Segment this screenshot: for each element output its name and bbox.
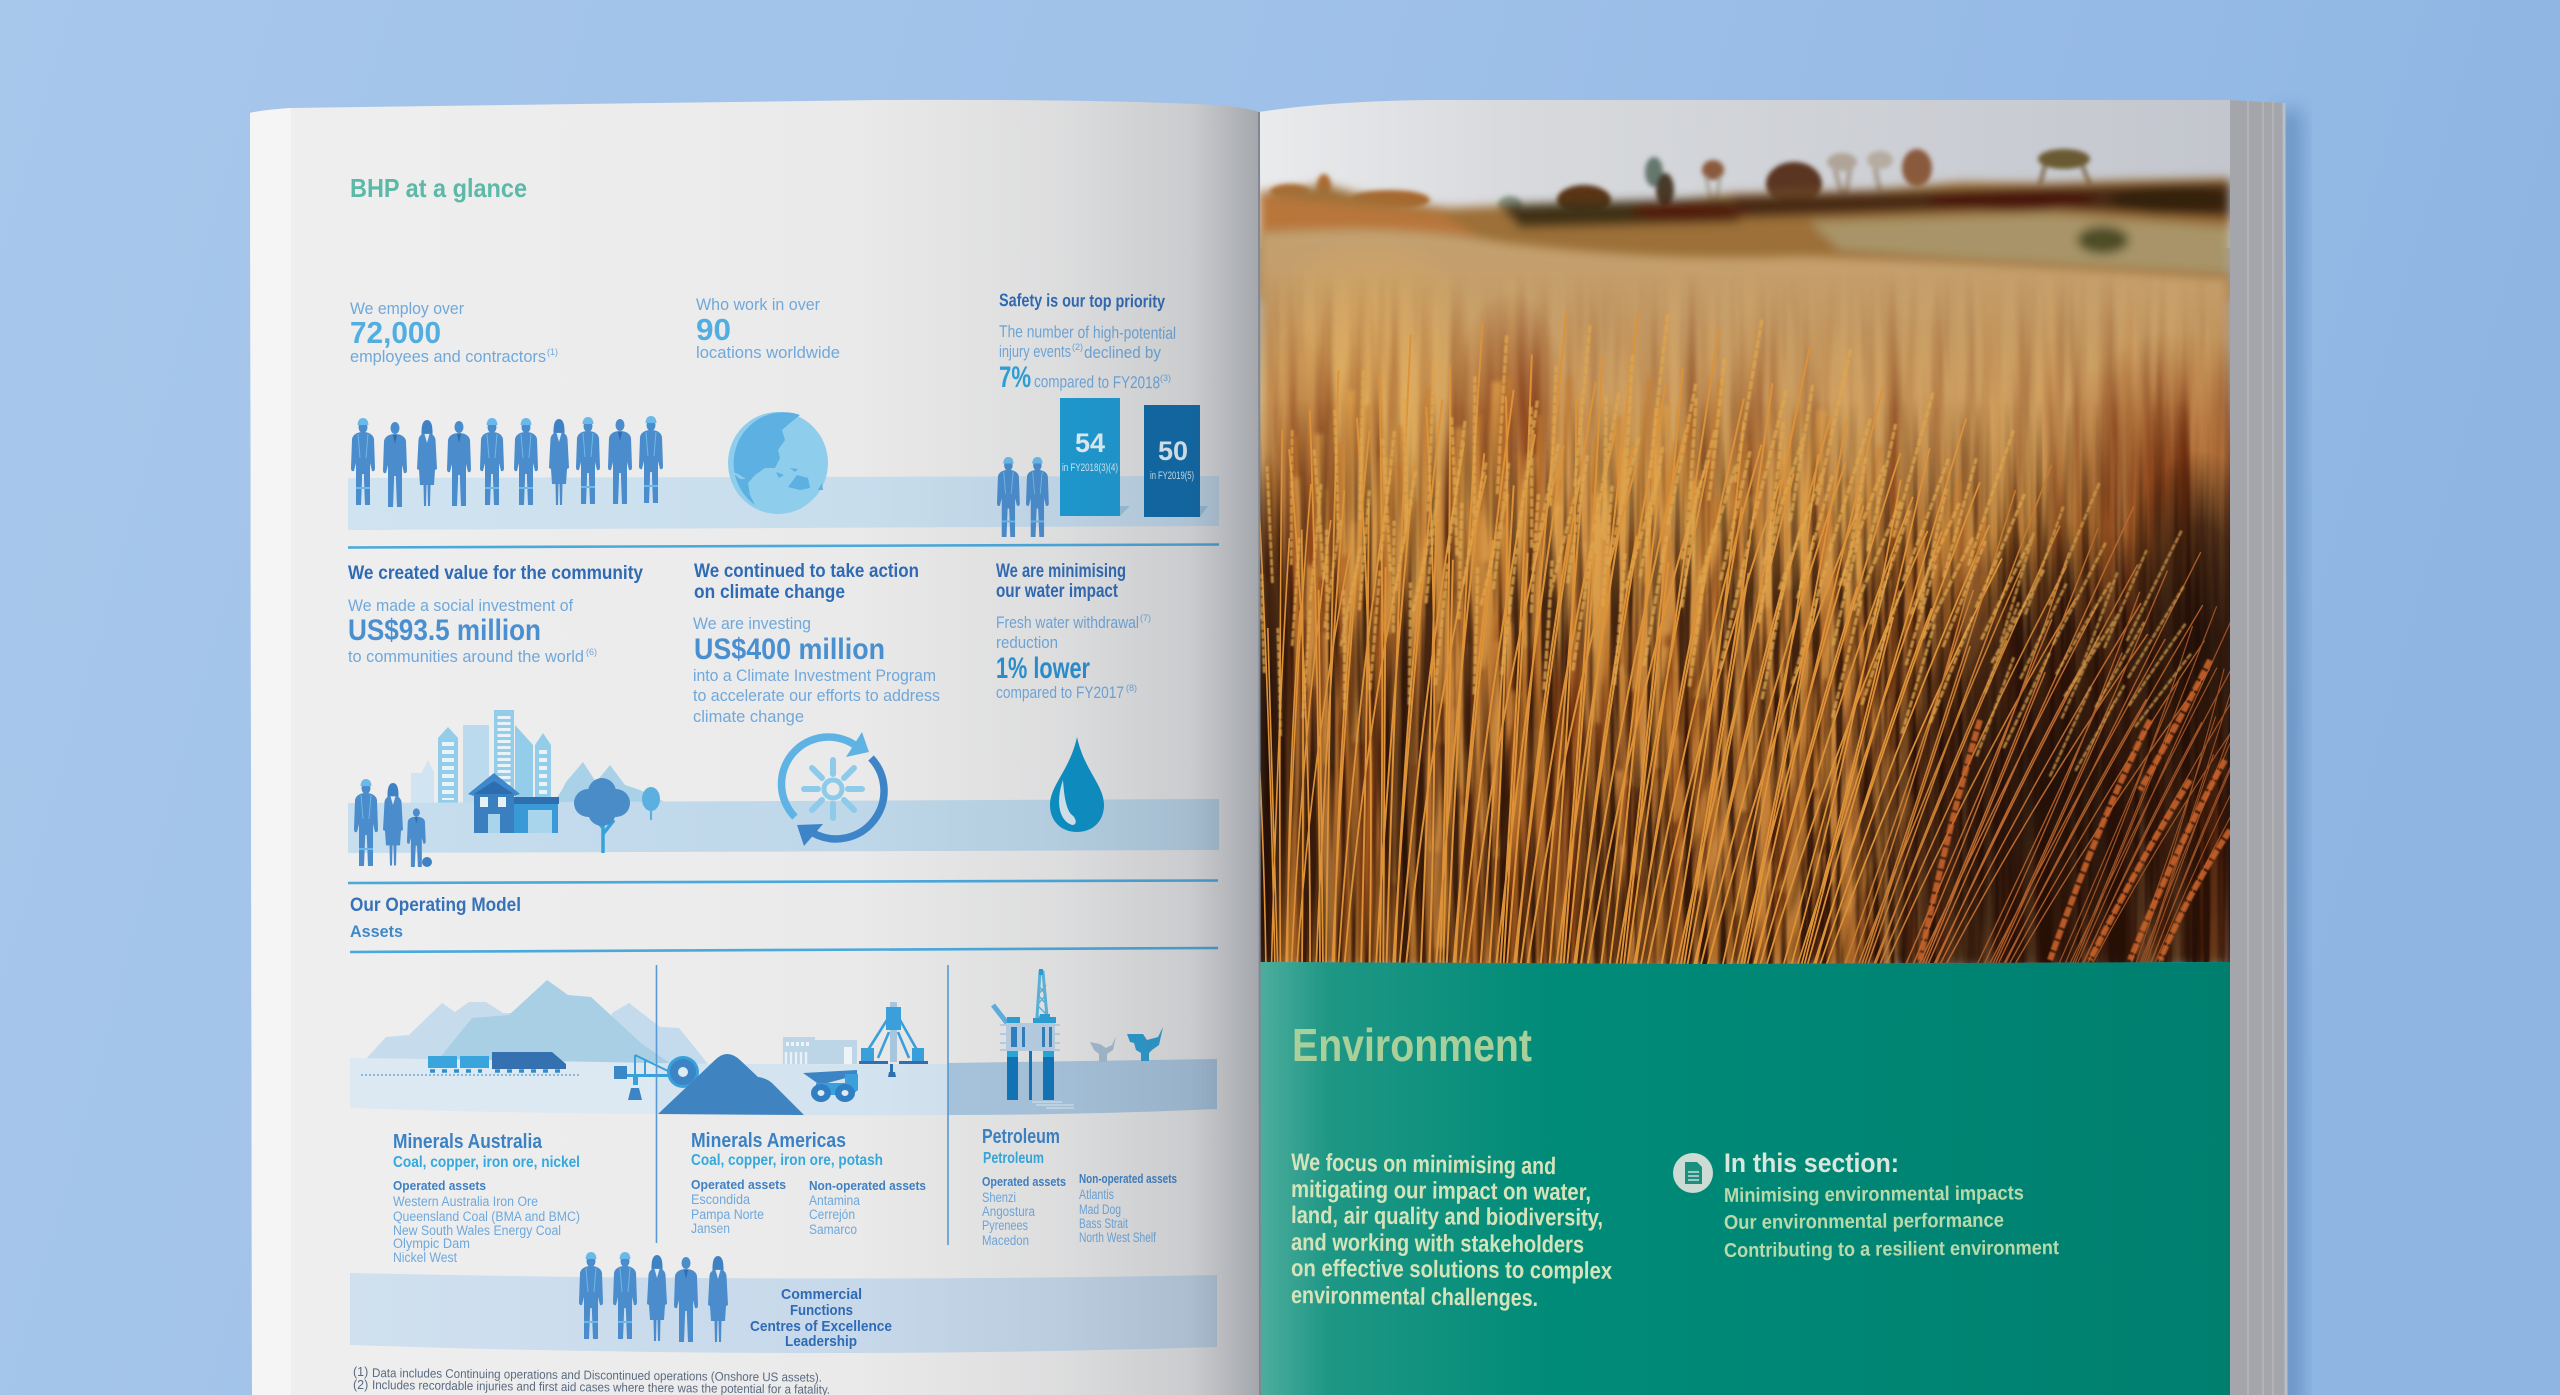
section list: In this section:: [1724, 1148, 1899, 1178]
block: community: to communities around the world: [348, 647, 584, 666]
title: BHP at a glance: [350, 173, 527, 203]
functions label: Functions: [790, 1302, 853, 1319]
intro paragraph: land, air quality and biodiversity,: [1291, 1202, 1603, 1232]
ground band 1: [348, 476, 1219, 530]
golden seed heads: [1260, 314, 2192, 778]
section list: Our environmental performance: [1724, 1210, 2004, 1234]
block: Minerals Australia: Queensland Coal (BMA and BMC): [393, 1209, 580, 1224]
page edge strip: [250, 108, 291, 1395]
stat: safety: injury events: [999, 342, 1071, 361]
functions label: Commercial: [781, 1286, 862, 1303]
block: water: compared to FY2017: [996, 683, 1124, 702]
block: Petroleum: Shenzi: [982, 1190, 1016, 1205]
block: water: We are minimising: [996, 561, 1126, 582]
block: Petroleum: Macedon: [982, 1233, 1029, 1248]
heading: operating model: Our Operating Model: [350, 895, 521, 916]
book shadow: [2278, 110, 2302, 1395]
stat: locations: [696, 295, 840, 362]
icon: train: [361, 1052, 581, 1075]
page edge stack: [2226, 100, 2287, 1395]
grass base: [1259, 229, 2230, 965]
block: climate: US$400 million: [694, 633, 885, 666]
block: Minerals Americas: Cerrejón: [809, 1207, 855, 1222]
distant trees: [1270, 149, 2090, 215]
stat: safety: 7%: [999, 361, 1031, 394]
page sheet: [250, 100, 1259, 1395]
footnotes: (1): [353, 1365, 368, 1379]
icon: small tree: [642, 787, 660, 820]
ground bands: [350, 1058, 1217, 1115]
photo: dry grass landscape: [1260, 100, 2230, 964]
stat: safety: declined by: [1084, 343, 1161, 362]
section list: [1724, 1148, 2059, 1262]
block: Petroleum: Mad Dog: [1079, 1202, 1121, 1217]
block: Minerals Australia: [393, 1131, 580, 1265]
stat: safety: [999, 290, 1176, 394]
stat: safety: compared to FY2018: [1034, 372, 1160, 392]
block: water: [996, 561, 1151, 702]
block: Minerals Americas: Escondida: [691, 1192, 750, 1207]
teal panel: [1259, 962, 2230, 1395]
grass tone patches: [1260, 280, 2230, 674]
heading: operating model: Assets: [350, 922, 403, 941]
icon: tree: [574, 778, 630, 853]
icon: climate cycle: [781, 732, 884, 846]
panel: right page: [1258, 100, 2230, 1395]
block: Petroleum: Angostura: [982, 1204, 1035, 1219]
section list: Contributing to a resilient environment: [1724, 1237, 2059, 1262]
block: climate: into a Climate Investment Program: [693, 666, 936, 685]
block: Minerals Americas: Antamina: [809, 1193, 860, 1208]
intro paragraph: mitigating our impact on water,: [1291, 1176, 1591, 1206]
icon: globe: [728, 412, 828, 514]
block: Petroleum: Non-operated assets: [1079, 1171, 1177, 1186]
bar FY2018: [1060, 398, 1130, 516]
block: climate: We are investing: [693, 614, 811, 633]
intro paragraph: We focus on minimising and: [1291, 1149, 1556, 1180]
block: Minerals Americas: Pampa Norte: [691, 1207, 764, 1222]
block: water: our water impact: [996, 581, 1119, 602]
block: Petroleum: Operated assets: [982, 1174, 1066, 1189]
ground band 4: [350, 1273, 1217, 1353]
block: Petroleum: Atlantis: [1079, 1187, 1114, 1202]
heading: operating model: [350, 895, 521, 941]
block: community: US$93.5 million: [348, 614, 541, 647]
block: water: (7): [1140, 613, 1151, 623]
stat: locations: locations worldwide: [696, 343, 840, 362]
block: Minerals Australia: Western Australia Iron Ore: [393, 1194, 538, 1209]
block: Minerals Americas: Jansen: [691, 1221, 730, 1236]
stat: employees: 72,000: [350, 315, 441, 350]
block: Petroleum: Pyrenees: [982, 1218, 1028, 1233]
intro paragraph: and working with stakeholders: [1291, 1229, 1584, 1259]
lower-right red heads: [1920, 660, 2230, 960]
block: Minerals Americas: [691, 1130, 926, 1237]
block: Minerals Australia: Minerals Australia: [393, 1131, 543, 1153]
stat: locations: Who work in over: [696, 295, 820, 314]
block: Minerals Australia: New South Wales Energy Coal: [393, 1223, 561, 1238]
stat: locations: 90: [696, 312, 731, 347]
ground band 2: [348, 799, 1219, 853]
panel: left page: [250, 95, 1260, 1395]
block: Petroleum: [982, 1126, 1177, 1248]
functions label: Centres of Excellence: [750, 1318, 892, 1335]
icon: reclaimer: [614, 1055, 699, 1100]
block: community: [348, 563, 643, 666]
section list: Minimising environmental impacts: [1724, 1182, 2024, 1207]
functions label: Leadership: [785, 1333, 857, 1350]
fine dark streaks: [1259, 400, 2230, 965]
dark shadow patches: [1260, 456, 2230, 963]
block: Minerals Australia: Nickel West: [393, 1250, 457, 1265]
block: Petroleum: Bass Strait: [1079, 1216, 1128, 1231]
grass streak texture: [1259, 260, 2230, 965]
icon: oil rig: [993, 969, 1074, 1108]
footnotes: Data includes Continuing operations and Discontinued operations (Onshore US assets).: [372, 1366, 822, 1385]
block: Minerals Americas: Minerals Americas: [691, 1130, 846, 1152]
bar FY2018: in FY2018(3)(4): [1062, 462, 1118, 474]
icon: two workers: [997, 457, 1049, 537]
icon: city skyline: [411, 710, 667, 803]
intro paragraph: [1291, 1149, 1613, 1312]
icon: ore pile: [658, 1054, 804, 1115]
intro paragraph: environmental challenges.: [1291, 1282, 1538, 1312]
stat: safety: Safety is our top priority: [999, 290, 1165, 311]
block: community: We made a social investment of: [348, 596, 573, 615]
block: Petroleum: Petroleum: [982, 1126, 1060, 1148]
icon: processing building: [783, 1037, 857, 1064]
block: Petroleum: Petroleum: [983, 1150, 1044, 1167]
block: Minerals Australia: Olympic Dam: [393, 1236, 470, 1251]
icon: water drop: [1050, 737, 1104, 832]
block: water: (8): [1126, 683, 1137, 693]
soft out-of-focus grass tufts: [1264, 376, 1994, 964]
intro paragraph: on effective solutions to complex: [1291, 1255, 1613, 1285]
block: climate: [693, 561, 940, 726]
block: water: 1% lower: [996, 652, 1090, 685]
block: climate: to accelerate our efforts to address: [693, 686, 940, 705]
block: Minerals Americas: Operated assets: [691, 1177, 786, 1192]
stat: safety: The number of high-potential: [999, 322, 1176, 343]
block: water: reduction: [996, 633, 1058, 652]
icon: family: [354, 779, 432, 867]
illustration: operating assets: [350, 969, 1217, 1115]
stat: safety: (3): [1160, 373, 1171, 383]
stat: employees: (1): [547, 347, 558, 357]
block: Minerals Australia: Coal, copper, iron ore, nickel: [393, 1154, 580, 1171]
mountains: [365, 980, 708, 1064]
sky: [1259, 98, 2230, 248]
bar FY2019: in FY2019(5): [1150, 470, 1194, 482]
icon: document: [1673, 1153, 1713, 1193]
block: Minerals Americas: Samarco: [809, 1222, 857, 1237]
bar FY2019: [1144, 405, 1208, 517]
stat: employees: We employ over: [350, 299, 464, 318]
functions label: [750, 1286, 892, 1350]
block: community: (6): [586, 647, 597, 657]
footnotes: (2): [353, 1378, 368, 1392]
block: Minerals Americas: Non-operated assets: [809, 1178, 926, 1193]
stat: employees: employees and contractors: [350, 347, 546, 366]
block: Minerals Americas: Coal, copper, iron ore, potash: [691, 1152, 883, 1169]
chart: safety bars: [997, 398, 1208, 537]
footnotes: [353, 1365, 830, 1395]
icon: headframe: [859, 1002, 928, 1077]
icon: row of ten employees: [351, 416, 663, 507]
block: community: We created value for the community: [348, 563, 643, 584]
icon: haul truck: [803, 1070, 858, 1102]
block: water: Fresh water withdrawal: [996, 613, 1139, 632]
icon: house: [468, 773, 559, 833]
block: climate: on climate change: [694, 582, 845, 603]
bar FY2018: 54: [1075, 428, 1105, 458]
hills: [1259, 178, 2230, 300]
heading: Environment: Environment: [1292, 1019, 1532, 1071]
block: Minerals Australia: Operated assets: [393, 1178, 486, 1193]
icon: five staff: [579, 1252, 728, 1342]
stat: employees: [350, 299, 558, 366]
stat: safety: (2): [1072, 342, 1083, 352]
block: Petroleum: North West Shelf: [1079, 1230, 1156, 1245]
spine line: [1259, 112, 1260, 1395]
icon: offshore platforms: [1090, 1027, 1163, 1062]
bar FY2019: 50: [1158, 436, 1188, 466]
sharp orange stems: [1260, 313, 2230, 964]
block: climate: climate change: [693, 707, 804, 726]
block: climate: We continued to take action: [694, 561, 919, 582]
spine shadow: [1018, 100, 1259, 1395]
